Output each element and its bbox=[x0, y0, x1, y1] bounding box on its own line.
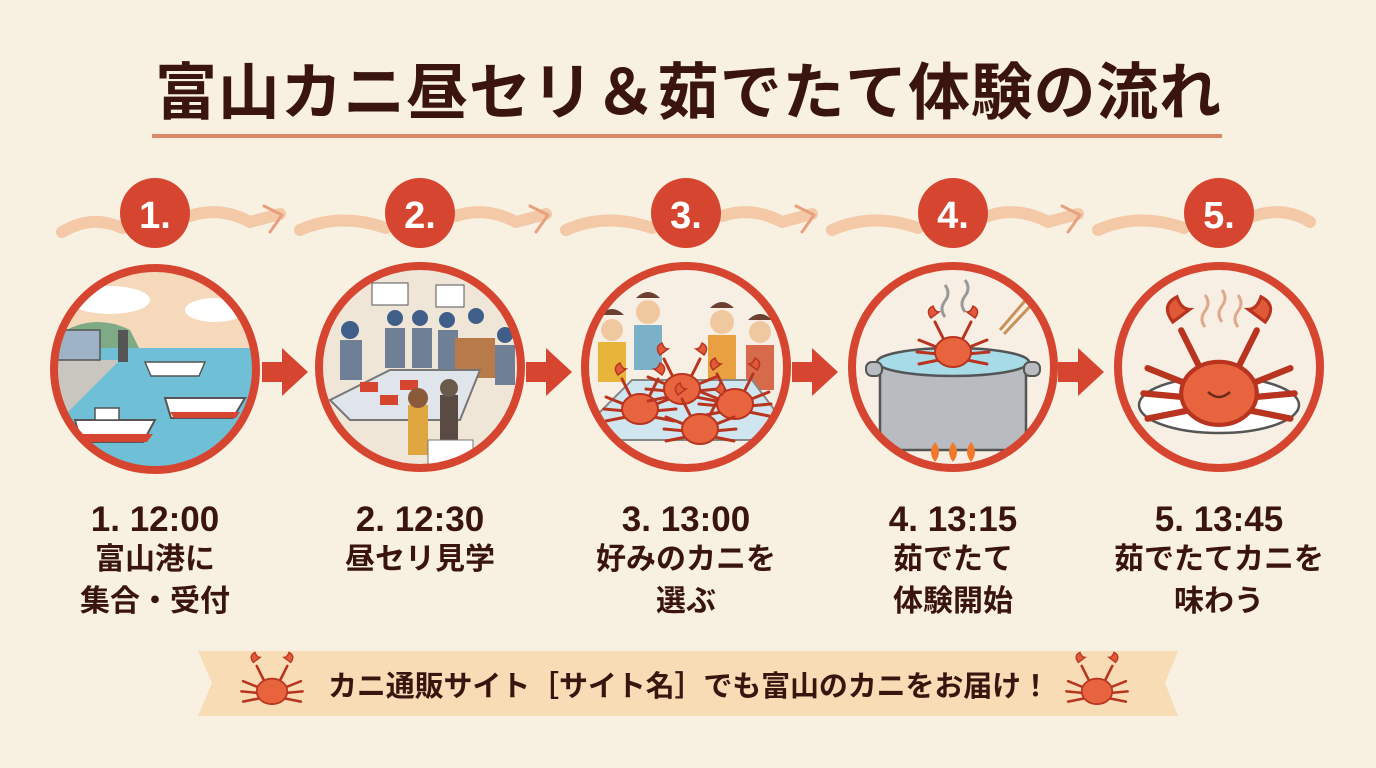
step labels: 集合・受付 bbox=[80, 585, 230, 618]
illustration 4: boiling pot bbox=[848, 262, 1058, 482]
number badges: 1. bbox=[139, 195, 171, 237]
step labels: 昼セリ見学 bbox=[345, 543, 495, 576]
illustration 2: market bbox=[315, 262, 525, 482]
step labels: 好みのカニを bbox=[596, 543, 776, 576]
step labels: 4. 13:15 bbox=[889, 500, 1017, 539]
illustration 5: crab on plate bbox=[1115, 262, 1325, 482]
step labels: 2. 12:30 bbox=[356, 500, 484, 539]
illustration 3: choosing crabs bbox=[580, 262, 790, 482]
number badges: 4. bbox=[937, 195, 969, 237]
step labels: 体験開始 bbox=[893, 585, 1013, 618]
step labels: 茹でたてカニを bbox=[1114, 543, 1324, 576]
step labels: 味わう bbox=[1174, 585, 1264, 618]
wavy arrows row bbox=[62, 206, 1310, 232]
banner: カニ通販サイト［サイト名］でも富山のカニをお届け！ bbox=[328, 670, 1050, 703]
step labels: 選ぶ bbox=[656, 585, 716, 618]
illustration 1: harbor bbox=[50, 260, 260, 488]
step labels bbox=[80, 500, 1324, 618]
step labels: 1. 12:00 bbox=[91, 500, 219, 539]
title: 富山カニ昼セリ＆茹でたて体験の流れ bbox=[155, 59, 1221, 128]
step labels: 3. 13:00 bbox=[622, 500, 750, 539]
number badges: 2. bbox=[404, 195, 436, 237]
number badges: 5. bbox=[1203, 195, 1235, 237]
step labels: 茹でたて bbox=[893, 543, 1013, 576]
number badges: 3. bbox=[670, 195, 702, 237]
step labels: 5. 13:45 bbox=[1155, 500, 1283, 539]
number badges bbox=[120, 178, 1254, 248]
banner bbox=[198, 651, 1178, 716]
arrows between circles bbox=[262, 348, 1104, 396]
step labels: 富山港に bbox=[95, 543, 215, 576]
